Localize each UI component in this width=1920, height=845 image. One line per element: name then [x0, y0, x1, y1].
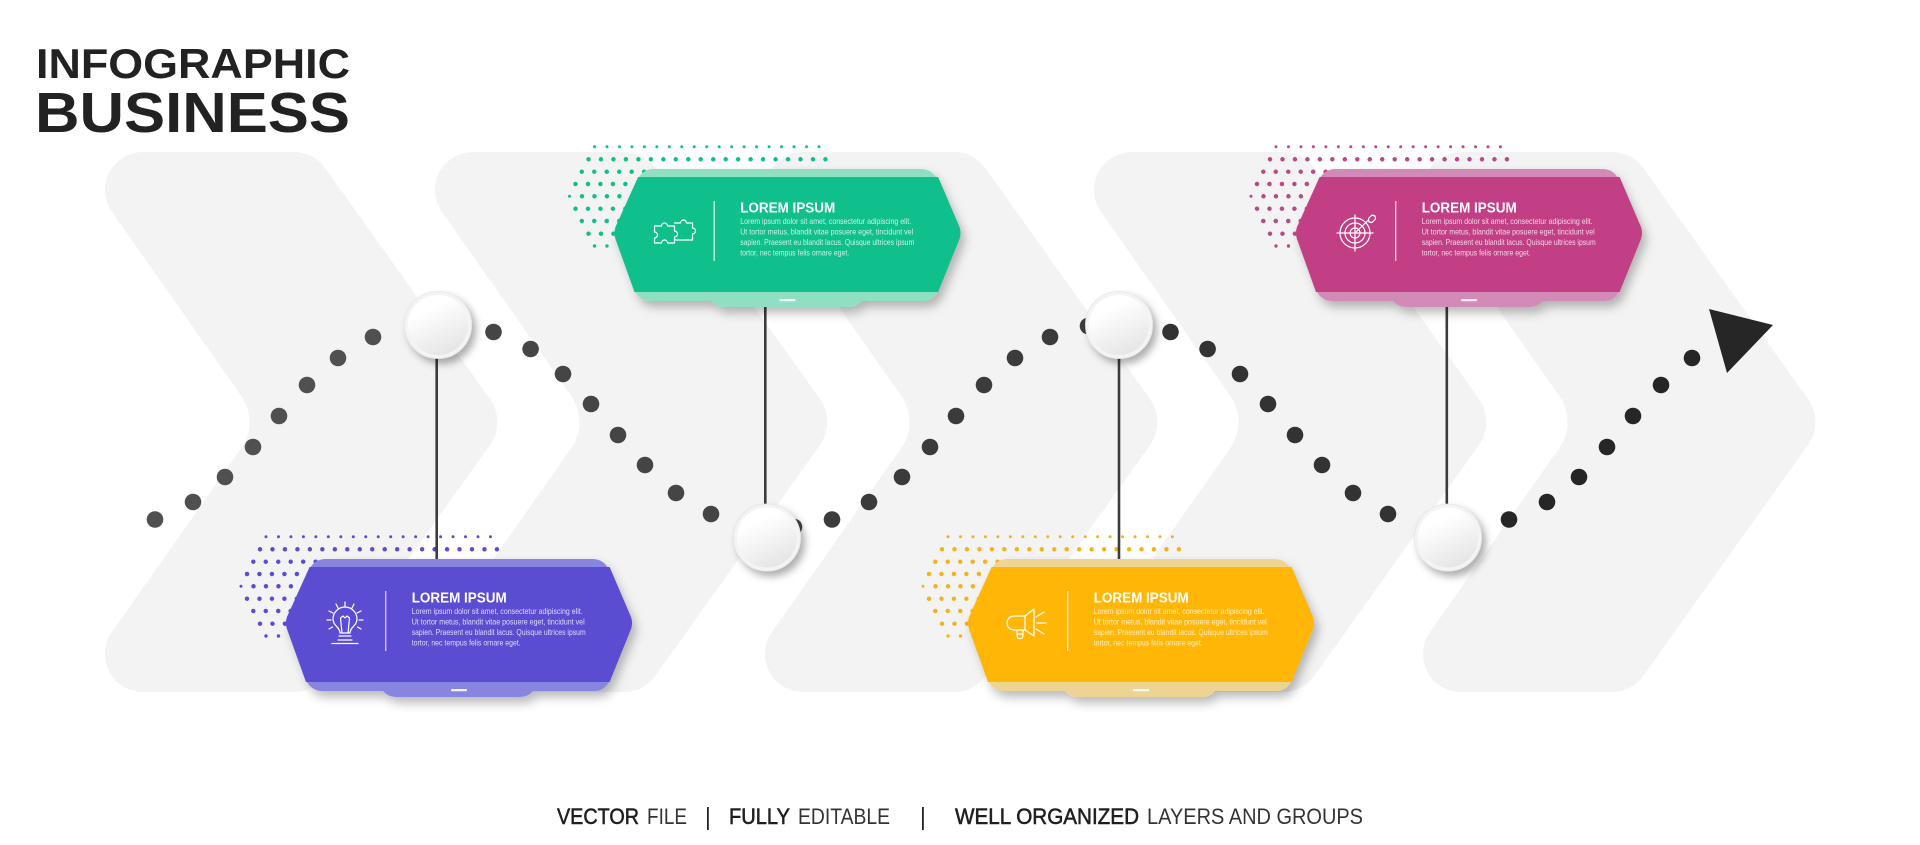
icon: target	[1337, 215, 1376, 251]
halftone dots: magenta	[1251, 147, 1508, 246]
panel: green card: Ut tortor metus, blandit vitae posuere eget, tincidunt vel	[740, 226, 913, 236]
title: BUSINESS	[35, 81, 350, 145]
icon: megaphone	[1007, 609, 1046, 638]
panel: yellow card: LOREM IPSUM	[1094, 591, 1189, 607]
panel: green card: sapien. Praesent eu blandit lacus. Quisque ultrices ipsum	[740, 237, 914, 247]
connector lines	[437, 300, 1447, 562]
panel: magenta card	[1296, 169, 1642, 307]
footer tagline: EDITABLE	[798, 804, 890, 829]
panel: yellow card	[968, 559, 1314, 697]
panel: green card	[614, 169, 960, 307]
node circle 4	[1414, 504, 1482, 571]
panel: magenta card: Ut tortor metus, blandit vitae posuere eget, tincidunt vel	[1422, 226, 1595, 236]
panel: purple card: Lorem ipsum dolor sit amet, consectetur adipiscing elit.	[412, 606, 583, 616]
footer tagline: WELL ORGANIZED	[955, 804, 1139, 829]
arrow head	[1709, 309, 1773, 373]
icon: light bulb	[327, 602, 363, 644]
footer tagline: LAYERS AND GROUPS	[1147, 804, 1363, 829]
dotted path	[147, 318, 1700, 535]
footer tagline: FULLY	[729, 804, 790, 829]
background chevrons	[105, 152, 1815, 692]
halftone dots: yellow	[923, 537, 1180, 636]
panel: magenta card: Lorem ipsum dolor sit amet, consectetur adipiscing elit.	[1422, 216, 1593, 226]
footer tagline: VECTOR	[557, 804, 639, 829]
panel: yellow card: Ut tortor metus, blandit vitae posuere eget, tincidunt vel	[1094, 616, 1267, 626]
panel: green card: LOREM IPSUM	[740, 201, 835, 217]
panel: yellow card: tortor, nec tempus felis ornare eget.	[1094, 638, 1203, 648]
panel: yellow card: sapien. Praesent eu blandit lacus. Quisque ultrices ipsum	[1094, 627, 1268, 637]
title	[35, 40, 350, 145]
panel: purple card: LOREM IPSUM	[412, 591, 507, 607]
node circle 3	[1086, 292, 1152, 358]
halftone dots: purple	[241, 537, 498, 636]
panel: purple card: sapien. Praesent eu blandit lacus. Quisque ultrices ipsum	[412, 627, 586, 637]
halftone dots: green	[570, 147, 826, 246]
title: INFOGRAPHIC	[36, 40, 350, 87]
footer tagline: FILE	[647, 804, 687, 829]
panel: magenta card: tortor, nec tempus felis ornare eget.	[1422, 248, 1531, 258]
node circle 1	[404, 292, 472, 358]
icon: puzzle	[654, 220, 696, 243]
node circle 2	[734, 504, 800, 571]
panel: yellow card: Lorem ipsum dolor sit amet, consectetur adipiscing elit.	[1094, 606, 1265, 616]
panel: purple card: Ut tortor metus, blandit vitae posuere eget, tincidunt vel	[412, 616, 585, 626]
panel: magenta card: LOREM IPSUM	[1422, 201, 1517, 217]
panel: purple card: tortor, nec tempus felis ornare eget.	[412, 638, 521, 648]
panel: green card: Lorem ipsum dolor sit amet, consectetur adipiscing elit.	[740, 216, 911, 226]
panel: magenta card: sapien. Praesent eu blandit lacus. Quisque ultrices ipsum	[1422, 237, 1596, 247]
footer tagline	[557, 804, 1363, 830]
panel: purple card	[286, 559, 632, 697]
panel: green card: tortor, nec tempus felis ornare eget.	[740, 248, 849, 258]
